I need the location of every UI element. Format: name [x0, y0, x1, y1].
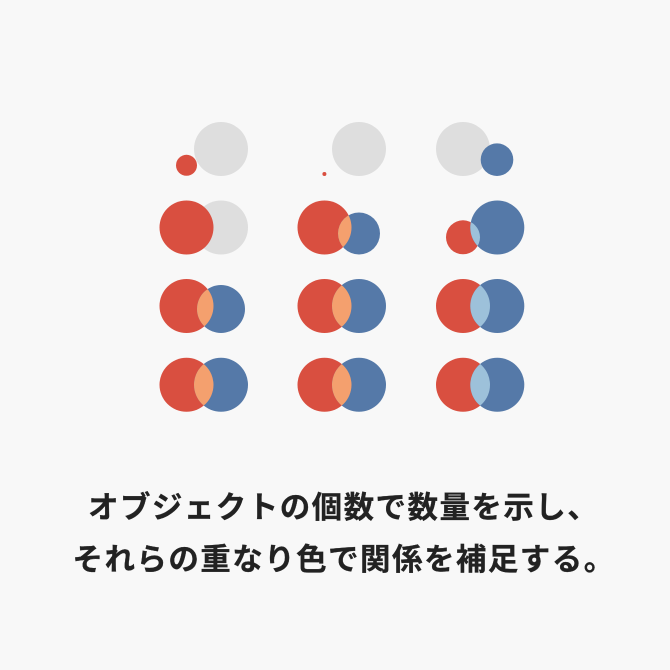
- venn: row 3 column 1: [160, 279, 245, 333]
- venn: row 3 column 2: [298, 279, 386, 333]
- venn: row 2 column 2: [298, 200, 380, 254]
- caption: line 2: それらの重なり色で関係を補足する。: [72, 543, 616, 577]
- venn: row 1 column 2: [322, 122, 386, 176]
- venn: row 4 column 2: [298, 358, 386, 412]
- venn: row 1 column 1: [176, 122, 248, 176]
- venn: row 2 column 3: [446, 200, 524, 254]
- chart: grid of overlapping circles: [160, 122, 524, 412]
- venn: row 1 column 3: [436, 122, 513, 176]
- venn: row 3 column 3: [436, 279, 524, 333]
- venn: row 4 column 3: [436, 358, 524, 412]
- venn: row 4 column 1: [160, 358, 248, 412]
- caption: line 1: オブジェクトの個数で数量を示し、: [88, 491, 599, 525]
- venn: row 2 column 1: [160, 200, 248, 254]
